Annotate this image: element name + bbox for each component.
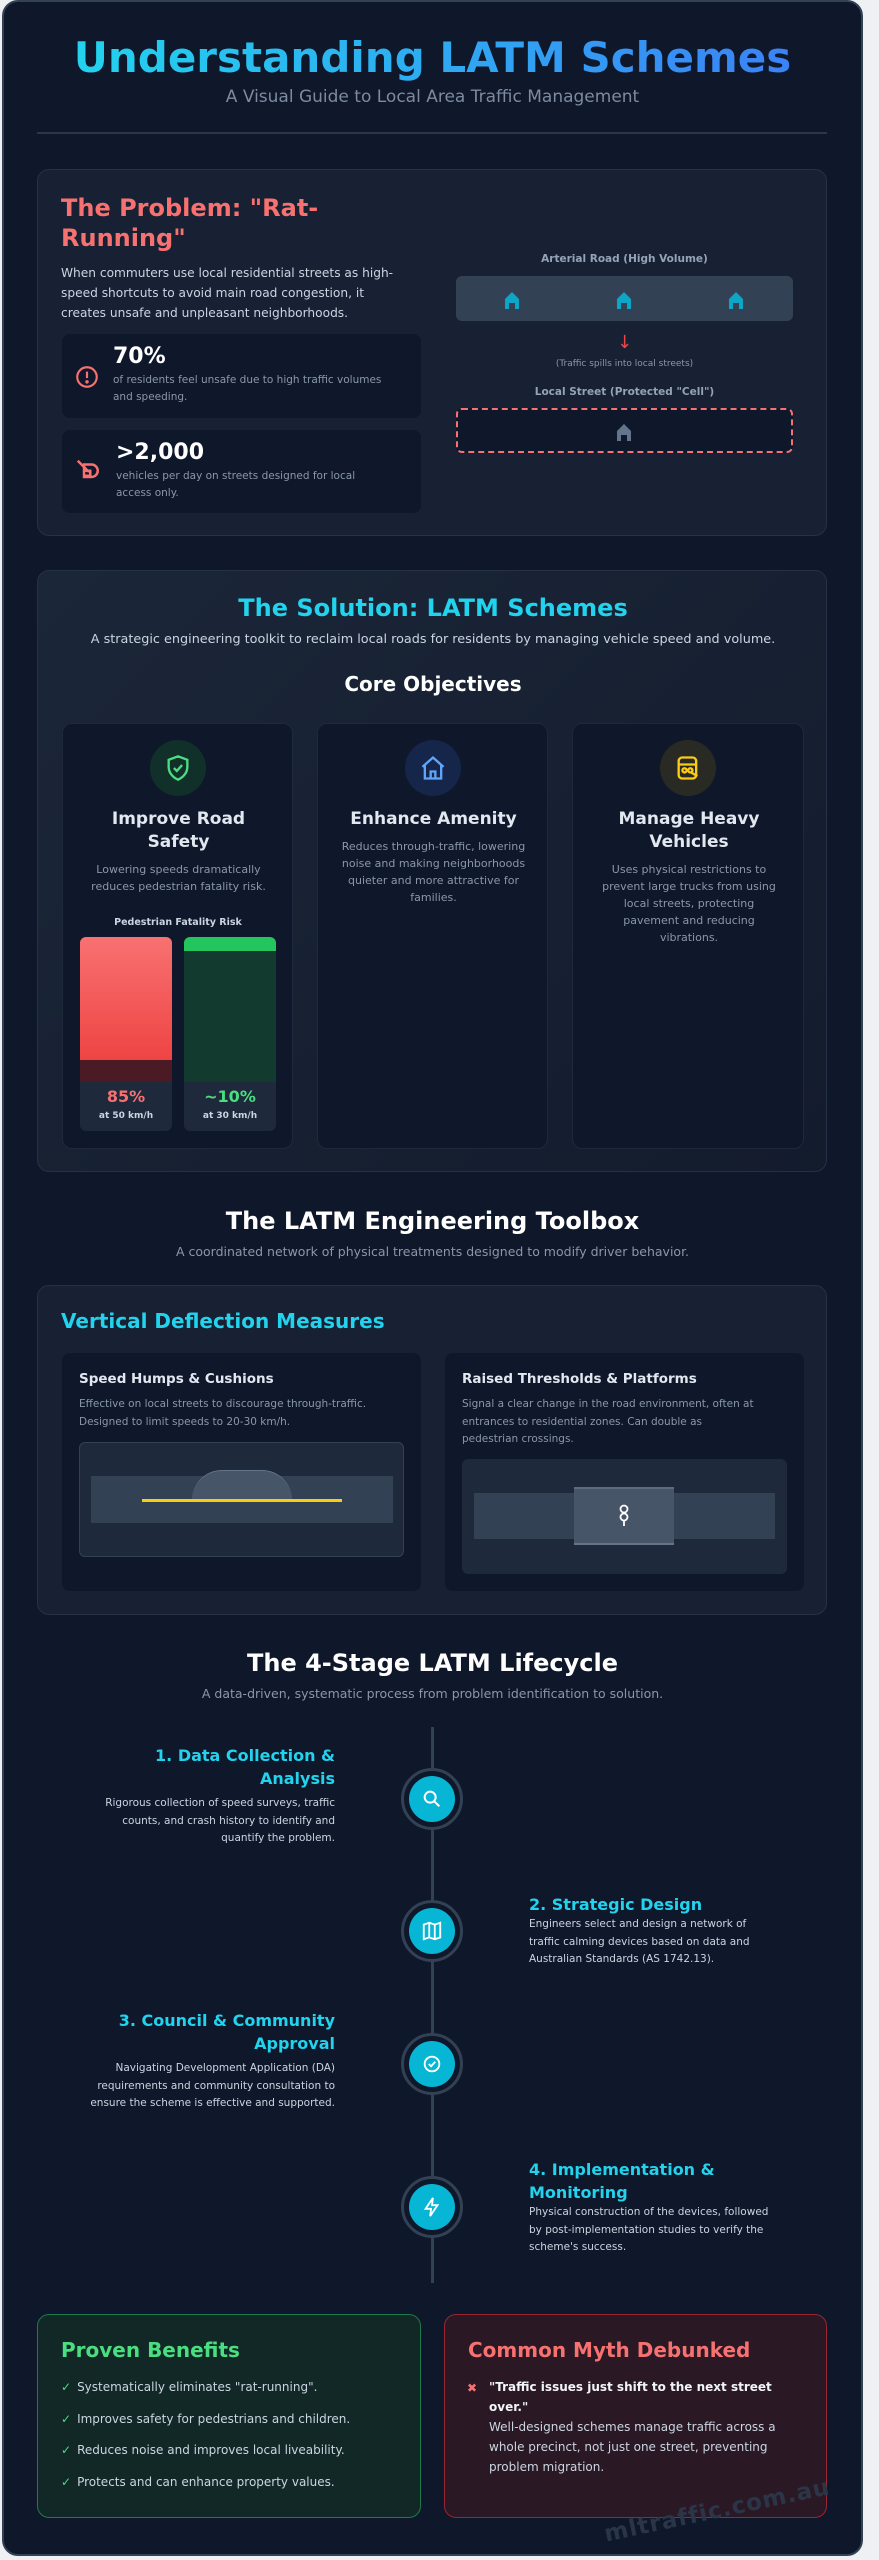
icon: map [401,1900,463,1962]
step 1: Analysis [260,1769,335,1788]
icon: truck [660,740,716,796]
toolbox subtitle: A coordinated network of physical treatments designed to modify driver behavior. [176,1244,689,1259]
stat: 70%: of residents feel unsafe due to high traffic volumes [113,374,381,386]
benefits list: ✓ Protects and can enhance property values. [61,2475,335,2489]
icon: alert [76,366,98,388]
card: raised thresholds: Raised Thresholds & Platforms [462,1371,697,1387]
vertical deflection heading: Vertical Deflection Measures [61,1309,385,1333]
solution heading: The Solution: LATM Schemes [238,594,628,622]
lifecycle heading: The 4-Stage LATM Lifecycle [247,1649,618,1677]
step 1: Rigorous collection of speed surveys, traffic [105,1797,335,1809]
panel: solution [37,570,827,1172]
card: raised thresholds: entrances to residential zones. Can double as [462,1416,702,1428]
card: amenity: noise and making neighborhoods [342,857,525,870]
step 2: Engineers select and design a network of [529,1918,746,1930]
step 2 [401,1895,750,1965]
card: road safety: reduces pedestrian fatality risk. [91,880,266,893]
card: raised thresholds [445,1353,804,1591]
core objectives heading: Core Objectives [344,672,522,696]
step 3: Navigating Development Application (DA) [115,2062,335,2074]
problem heading: Running" [61,224,186,252]
card: road safety: Improve Road [112,809,245,829]
bar chart: fatality risk: ~10% [204,1087,256,1106]
illustration: speed hump [79,1442,404,1557]
bar chart: fatality risk: at 50 km/h [99,1111,153,1121]
toolbox heading: The LATM Engineering Toolbox [226,1207,639,1235]
panel: solution: A strategic engineering toolkit to reclaim local roads for residents by managing vehicle speed and volume. [91,632,775,647]
icon: bolt [401,2176,463,2238]
myth text: over." [489,2400,528,2414]
diagram: road network: Arterial Road (High Volume) [541,253,708,265]
card: raised thresholds: pedestrian crossings. [462,1433,574,1445]
stat: 2000: >2,000 [116,440,204,465]
card: road safety [62,723,293,1149]
myth text: whole precinct, not just one street, preventing [489,2440,768,2454]
watermark: mltraffic.com.au [602,2474,832,2547]
card: heavy vehicles: Manage Heavy [618,809,759,829]
step 2: traffic calming devices based on data and [529,1936,750,1948]
panel: problem [37,169,827,536]
illustration: raised platform [462,1459,787,1574]
bar chart: fatality risk: Pedestrian Fatality Risk [114,917,242,928]
card: speed humps: Effective on local streets to discourage through-traffic. [79,1398,366,1410]
lifecycle subtitle: A data-driven, systematic process from problem identification to solution. [202,1686,663,1701]
panel: myth debunked [444,2314,827,2518]
problem text: When commuters use local residential streets as high- [61,266,393,280]
benefits list: ✓ Systematically eliminates "rat-running". [61,2380,317,2394]
card: heavy vehicles [572,723,804,1149]
bar chart: fatality risk [80,917,276,1131]
arrow: down: ↓ [617,332,632,353]
step 4: Physical construction of the devices, followed [529,2206,768,2218]
benefits list: ✓ Improves safety for pedestrians and children. [61,2412,350,2426]
benefits list [61,2380,350,2489]
diagram: road network: (Traffic spills into local streets) [556,359,693,369]
card: amenity: Reduces through-traffic, lowering [342,840,525,853]
arterial road [456,276,793,321]
stat: 70%: 70% [113,344,166,369]
myth text: problem migration. [489,2460,604,2474]
icon: shield [150,740,206,796]
panel: proven benefits [37,2314,421,2518]
step 4: Monitoring [529,2183,628,2202]
stat: 2000: vehicles per day on streets designed for local [116,470,355,482]
problem text: speed shortcuts to avoid main road congestion, it [61,286,364,300]
bar chart: fatality risk: at 30 km/h [203,1111,257,1121]
diagram: road network: Local Street (Protected "Cell") [535,386,714,398]
problem text: creates unsafe and unpleasant neighborhoods. [61,306,348,320]
problem heading: The Problem: "Rat- [61,194,318,222]
card: speed humps: Designed to limit speeds to 20-30 km/h. [79,1416,290,1428]
problem text [61,266,393,320]
card: heavy vehicles: prevent large trucks from using [602,880,776,893]
stat: 2000 [62,430,421,513]
panel: myth debunked: ✖ [467,2381,477,2395]
stat: 70%: and speeding. [113,391,187,403]
local street [456,408,793,453]
myth text [489,2380,776,2474]
myth text: "Traffic issues just shift to the next street [489,2380,772,2394]
benefits list: ✓ Reduces noise and improves local liveability. [61,2443,345,2457]
icon: search [401,1768,463,1830]
title: Understanding LATM Schemes [74,33,791,82]
step 4 [401,2160,768,2253]
myth text: Well-designed schemes manage traffic across a [489,2420,776,2434]
step 4: 4. Implementation & [529,2160,715,2179]
card: speed humps: Speed Humps & Cushions [79,1371,274,1387]
step 4: by post-implementation studies to verify the [529,2224,763,2236]
step 2: 2. Strategic Design [529,1895,702,1914]
card: heavy vehicles: Vehicles [649,832,729,852]
step 3: Approval [254,2034,335,2053]
card: heavy vehicles: vibrations. [660,931,718,944]
stat: 70% [62,334,421,418]
card: amenity: quieter and more attractive for [348,874,519,887]
panel: vertical deflection [37,1285,827,1615]
step 1: 1. Data Collection & [155,1746,335,1765]
diagram: road network [456,253,793,453]
step 3: 3. Council & Community [119,2011,335,2030]
card: speed humps [62,1353,421,1591]
card: heavy vehicles: local streets, protecting [624,897,754,910]
card: heavy vehicles: pavement and reducing [623,914,755,927]
panel: proven benefits: Proven Benefits [61,2338,240,2362]
step 1 [105,1746,463,1844]
card: road safety: Lowering speeds dramatically [96,863,261,876]
icon: house [405,740,461,796]
card: heavy vehicles: Uses physical restrictions to [612,863,766,876]
problem heading [61,194,318,252]
step 1: counts, and crash history to identify and [122,1814,335,1826]
card: raised thresholds: Signal a clear change in the road environment, often at [462,1398,754,1410]
icon: check [401,2033,463,2095]
step 3 [90,2011,463,2109]
panel: myth debunked: Common Myth Debunked [468,2338,750,2362]
card: road safety: Safety [148,832,209,852]
card: amenity [317,723,548,1149]
step 3: ensure the scheme is effective and supported. [90,2097,335,2109]
icon: no car [76,460,99,478]
step 1: quantify the problem. [221,1832,335,1844]
card: amenity: Enhance Amenity [350,809,517,829]
step 4: scheme's success. [529,2241,626,2253]
stat: 2000: access only. [116,487,179,499]
card: amenity: families. [410,891,457,904]
step 3: requirements and community consultation to [97,2080,335,2092]
bar chart: fatality risk: 85% [107,1087,145,1106]
subtitle: A Visual Guide to Local Area Traffic Management [226,87,639,107]
step 2: Australian Standards (AS 1742.13). [529,1953,714,1965]
timeline [90,1727,768,2283]
